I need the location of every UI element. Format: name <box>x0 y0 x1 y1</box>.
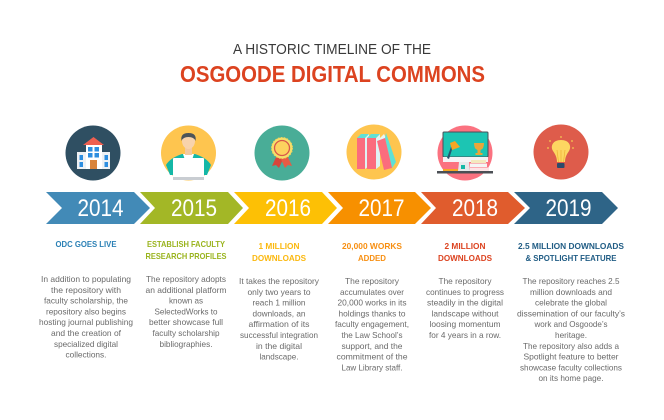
body text: reach 1 million <box>252 299 306 308</box>
heading: 2.5 million downloads and spotlight feature: & SPOTLIGHT FEATURE <box>526 254 617 263</box>
heading: 20,000 works added <box>342 242 403 263</box>
arrow: 2016: 2016 <box>265 195 311 222</box>
arrow: 2017: 2017 <box>358 195 404 222</box>
body text <box>426 277 504 340</box>
heading: 1 million downloads: DOWNLOADS <box>252 254 307 263</box>
body text: hosting journal publishing <box>39 318 133 327</box>
body text: continues to progress <box>426 288 504 297</box>
arrow: 2017 <box>328 192 431 224</box>
body text: on its home page. <box>538 374 604 383</box>
body text: bibliographies. <box>160 340 212 349</box>
heading: ODC goes live: ODC GOES LIVE <box>56 240 117 249</box>
body text: It takes the repository <box>239 277 320 286</box>
body text: affirmation of its <box>248 320 310 329</box>
body text: The repository reaches 2.5 <box>522 277 620 286</box>
body text: steadily in the digital <box>427 299 503 308</box>
heading: 20,000 works added: 20,000 WORKS <box>342 242 403 251</box>
icon: building <box>66 126 120 180</box>
icon: person with laptop <box>161 126 216 180</box>
body text: heritage. <box>555 331 587 340</box>
body text <box>335 277 409 372</box>
arrow: 2014 <box>46 192 150 224</box>
body text: the Law School’s <box>342 331 402 340</box>
body text: showcase faculty collections <box>520 363 622 372</box>
body text: commitment of the <box>336 353 408 362</box>
heading: establish faculty research profiles <box>146 240 227 261</box>
body text: The repository <box>345 277 400 286</box>
title: A HISTORIC TIMELINE OF THE <box>233 42 431 58</box>
heading: 2.5 million downloads and spotlight feature <box>518 242 625 263</box>
body text: dissemination of our faculty’s <box>517 309 625 318</box>
body text: faculty scholarship, the <box>44 297 128 306</box>
arrow: 2019 <box>514 192 618 224</box>
body text: faculty engagement, <box>335 320 409 329</box>
body text <box>239 277 320 362</box>
body text: The repository <box>438 277 492 286</box>
body text: and the creation of <box>51 329 122 338</box>
column: 2018 text <box>426 242 504 340</box>
body text: Spotlight feature to better <box>524 353 619 362</box>
body text: faculty scholarship <box>152 329 220 338</box>
heading: 2 million downloads: DOWNLOADS <box>438 254 493 263</box>
body text: The repository also adds a <box>523 342 619 351</box>
body text: an additional platform <box>146 286 227 295</box>
heading: 2.5 million downloads and spotlight feature: 2.5 MILLION DOWNLOADS <box>518 242 625 251</box>
body text: landscape. <box>260 353 298 362</box>
body text: collections. <box>66 351 106 360</box>
body text: The repository adopts <box>146 275 226 284</box>
arrow: 2018 <box>421 192 525 224</box>
icon: light bulb <box>534 124 588 180</box>
body text: Law Library staff. <box>342 363 402 372</box>
arrow: 2018: 2018 <box>452 195 498 222</box>
body text: work and Osgoode’s <box>534 320 608 329</box>
body text: 20,000 works in its <box>338 299 406 308</box>
body text: repository also begins <box>46 307 126 316</box>
column: 2014 text <box>39 240 133 360</box>
heading: 2 million downloads <box>438 242 493 263</box>
heading: 1 million downloads <box>252 242 307 263</box>
arrow: 2019: 2019 <box>546 195 592 222</box>
arrow: 2015 <box>140 192 243 224</box>
body text: loosing momentum <box>430 320 501 329</box>
body text: celebrate the global <box>535 299 607 308</box>
body text <box>517 277 625 383</box>
body text: only two years to <box>248 288 311 297</box>
body text <box>146 275 227 349</box>
icon: award ribbon <box>254 126 310 180</box>
icon: books <box>346 124 402 180</box>
body text: better showcase full <box>149 318 223 327</box>
body text: support, and the <box>342 342 403 351</box>
body text: for 4 years in a row. <box>429 331 501 340</box>
column: 2015 text <box>146 240 227 349</box>
heading: establish faculty research profiles: RESEARCH PROFILES <box>146 252 227 261</box>
heading: establish faculty research profiles: ESTABLISH FACULTY <box>147 240 225 249</box>
icon: desk with monitor <box>437 126 493 180</box>
column: 2017 text <box>335 242 409 372</box>
body text: known as <box>169 297 203 306</box>
body text: in the digital <box>256 342 302 351</box>
arrow: 2015: 2015 <box>171 195 217 222</box>
arrow: 2016 <box>234 192 337 224</box>
body text: the repository with <box>51 286 121 295</box>
body text: accumulates over <box>340 288 404 297</box>
heading: 2 million downloads: 2 MILLION <box>444 242 486 251</box>
body text: SelectedWorks to <box>154 307 218 316</box>
body text: successful integration <box>240 331 318 340</box>
title <box>180 42 485 87</box>
column: 2019 text <box>517 242 625 383</box>
body text: downloads, an <box>252 309 306 318</box>
body text: specialized digital <box>54 340 118 349</box>
heading: 1 million downloads: 1 MILLION <box>258 242 300 251</box>
body text: million downloads and <box>530 288 612 297</box>
body text: holdings thanks to <box>338 309 406 318</box>
title: OSGOODE DIGITAL COMMONS <box>180 61 485 87</box>
heading: 20,000 works added: ADDED <box>358 254 386 263</box>
arrow: 2014: 2014 <box>78 195 124 222</box>
body text: landscape without <box>432 309 499 318</box>
body text <box>39 275 133 360</box>
column: 2016 text <box>239 242 320 362</box>
body text: In addition to populating <box>41 275 131 284</box>
